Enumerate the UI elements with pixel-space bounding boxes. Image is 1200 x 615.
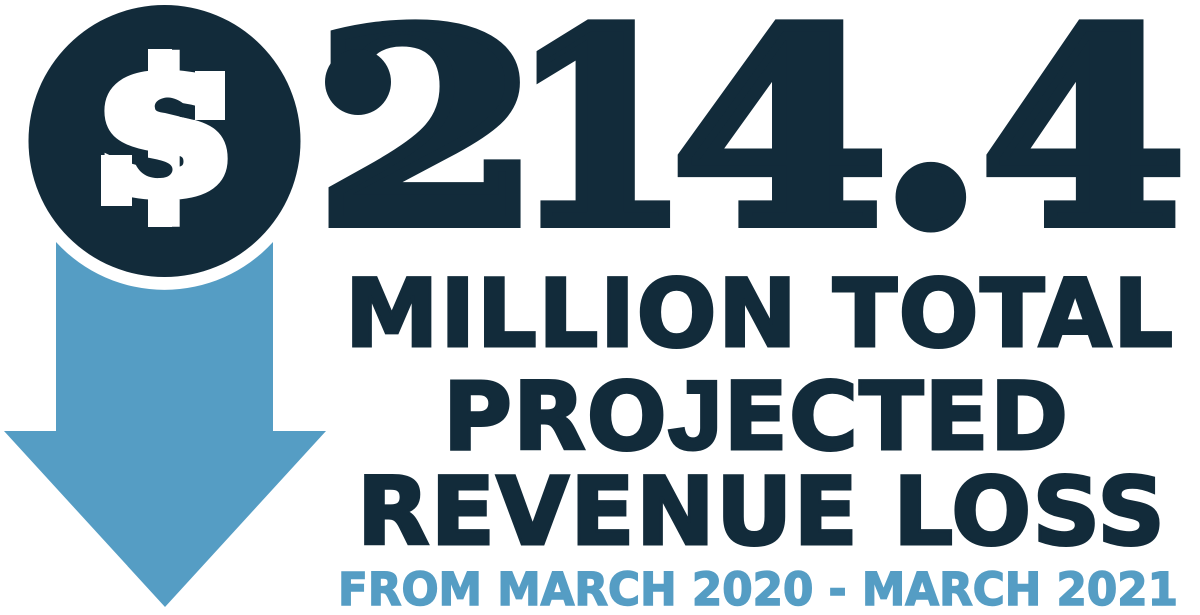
icon: dollar coin [28,5,300,277]
heading: million total: MILLION TOTAL [345,260,1173,369]
date range subheading: FROM MARCH 2020 - MARCH 2021 [338,563,1178,615]
icon: dollar coin: $ [95,26,235,238]
heading: projected: PROJECTED [443,360,1068,472]
headline figure [314,0,1186,297]
heading: revenue loss: REVENUE LOSS [357,458,1165,567]
icon: down arrow [4,242,326,607]
